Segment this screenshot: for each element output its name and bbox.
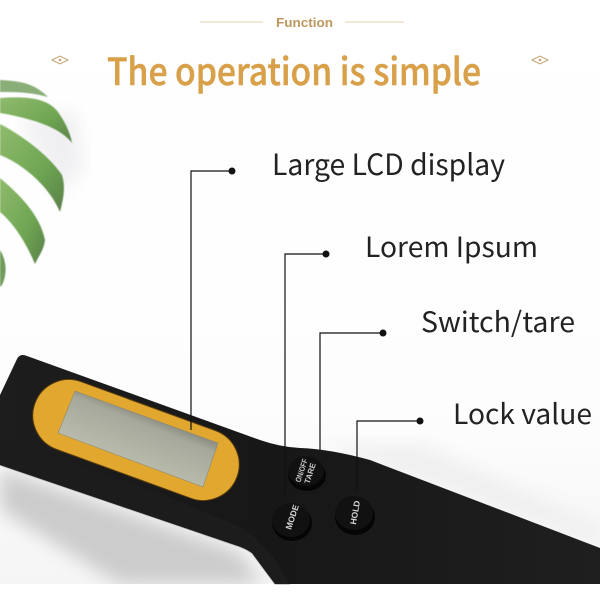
icon: left diamond <box>52 56 68 64</box>
LCD screen <box>58 391 218 487</box>
callout: Lock value: Lock value <box>453 393 592 433</box>
button: MODE: MODE <box>283 503 301 531</box>
callout: Lock value <box>357 393 592 491</box>
button: ON/OFF TARE: ON/OFF <box>294 458 310 483</box>
icon: right diamond <box>532 56 548 64</box>
callout: Large LCD display: Large LCD display <box>272 142 505 184</box>
button: HOLD <box>335 496 375 535</box>
button: HOLD: HOLD <box>348 500 362 525</box>
callout: Lorem Ipsum: Lorem Ipsum <box>365 226 538 266</box>
callout: Switch/tare <box>320 301 575 450</box>
button: MODE <box>272 503 312 541</box>
callout: Lorem Ipsum <box>285 226 538 495</box>
button: ON/OFF TARE: TARE <box>303 461 318 485</box>
callout: Switch/tare: Switch/tare <box>421 301 575 341</box>
spoon scale body <box>0 355 600 584</box>
button: ON/OFF TARE <box>288 456 326 491</box>
front edge shading <box>0 436 290 584</box>
callout: Large LCD display <box>191 142 505 430</box>
title: The operation is simple <box>107 42 481 96</box>
icon: palm leaves <box>0 80 72 287</box>
panel: yellow display bezel <box>23 369 249 511</box>
heading: Function: Function <box>276 15 333 30</box>
